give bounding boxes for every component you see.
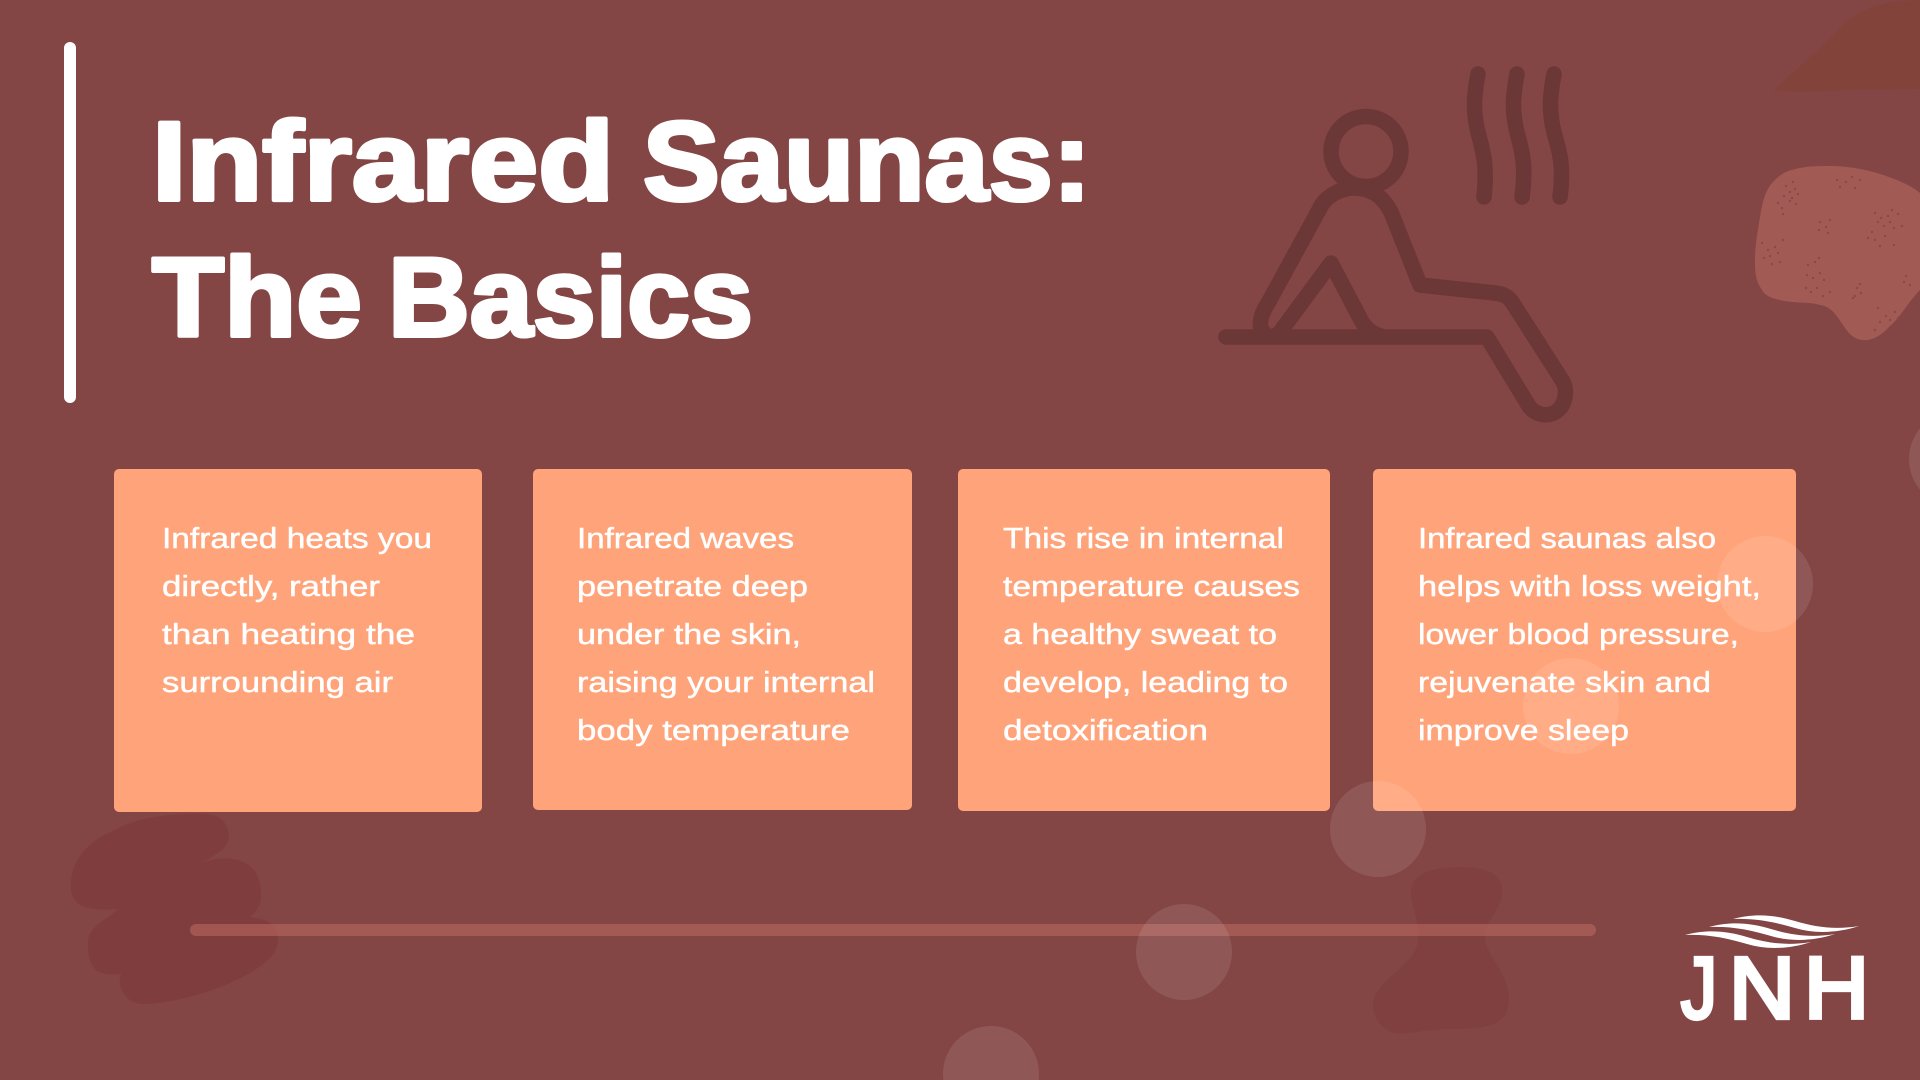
card 1: directly, rather — [162, 571, 380, 603]
logo wordmark: H — [1804, 940, 1869, 1037]
card 4: improve sleep — [1418, 715, 1629, 747]
card 2: Infrared waves — [577, 523, 794, 555]
card 1 — [114, 469, 482, 812]
card 3: temperature causes — [1003, 571, 1300, 603]
card 3 — [958, 469, 1330, 811]
card 2: under the skin, — [577, 619, 801, 651]
card 1: surrounding air — [162, 667, 393, 699]
card 3: develop, leading to — [1003, 667, 1288, 699]
card 2: raising your internal — [577, 667, 875, 699]
card 4: helps with loss weight, — [1418, 571, 1761, 603]
body and bench — [1226, 188, 1565, 415]
speckle texture — [1762, 177, 1910, 330]
card 1: Infrared heats you — [162, 523, 432, 555]
logo wordmark — [1681, 940, 1869, 1037]
icon: person in sauna with steam — [1226, 74, 1565, 415]
blob: dark bottom centre — [1373, 867, 1509, 1033]
bottom progress bar — [190, 924, 1596, 936]
card 3: a healthy sweat to — [1003, 619, 1277, 651]
logo waves — [1685, 915, 1859, 948]
logo wordmark: J — [1681, 940, 1717, 1037]
card 3: detoxification — [1003, 715, 1208, 747]
blob: top right corner — [1774, 0, 1920, 92]
title: Saunas: — [643, 99, 1091, 224]
card 4: lower blood pressure, — [1418, 619, 1739, 651]
blob: dark left — [71, 814, 278, 1004]
head — [1331, 116, 1401, 186]
card 1: than heating the — [162, 619, 415, 651]
title: The — [152, 235, 362, 360]
logo wordmark: N — [1729, 940, 1795, 1037]
title accent bar — [64, 42, 76, 403]
title: Basics — [388, 235, 753, 360]
card 2: penetrate deep — [577, 571, 808, 603]
steam lines — [1474, 74, 1562, 197]
card 4: Infrared saunas also — [1418, 523, 1716, 555]
card 3: This rise in internal — [1003, 523, 1284, 555]
logo: JNH — [1681, 915, 1869, 1037]
card 4 — [1373, 469, 1796, 811]
title: Infrared — [152, 99, 614, 224]
card 2: body temperature — [577, 715, 850, 747]
card 4: rejuvenate skin and — [1418, 667, 1711, 699]
blob: speckled right — [1755, 166, 1920, 340]
title — [152, 99, 1091, 360]
card 2 — [533, 469, 912, 810]
decorative translucent circles — [943, 411, 1920, 1080]
